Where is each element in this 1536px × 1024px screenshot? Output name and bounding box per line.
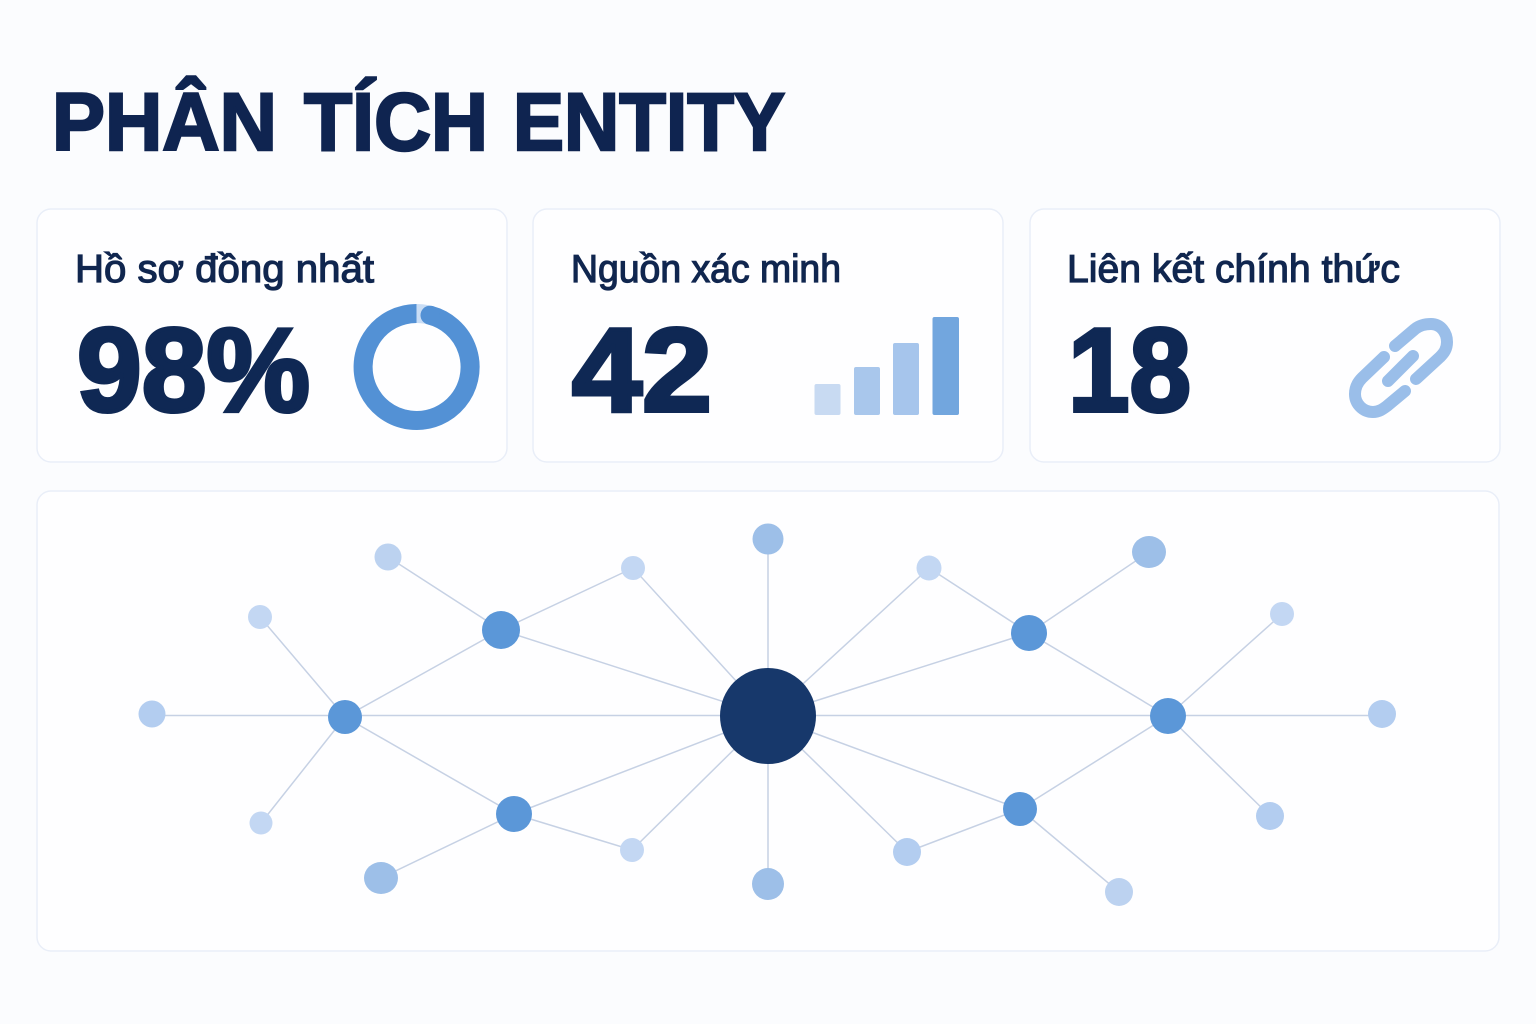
label: consistent profiles: Hồ sơ đồng nhất bbox=[75, 248, 374, 291]
label: official links: Liên kết chính thức bbox=[1067, 248, 1400, 291]
outer nodes bbox=[138, 524, 1396, 906]
panel: entity network bbox=[37, 491, 1499, 951]
value: 42: 42 bbox=[572, 304, 712, 437]
network edges bbox=[152, 539, 1382, 892]
title bbox=[52, 77, 785, 168]
icon: chain link bbox=[1355, 324, 1447, 412]
central node bbox=[720, 668, 816, 764]
bar chart bbox=[814, 317, 959, 415]
value: 18: 18 bbox=[1068, 304, 1191, 437]
panel: official links bbox=[1030, 209, 1500, 462]
panel: verified sources bbox=[533, 209, 1003, 462]
panel: consistent profiles bbox=[37, 209, 507, 462]
icon: donut chart bbox=[363, 306, 470, 420]
value: 98%: 98% bbox=[77, 304, 310, 437]
title: ENTITY bbox=[513, 77, 785, 168]
title: PHÂN bbox=[52, 77, 277, 168]
hub nodes bbox=[328, 611, 1186, 832]
label: verified sources: Nguồn xác minh bbox=[571, 248, 841, 291]
title: TÍCH bbox=[304, 77, 488, 168]
